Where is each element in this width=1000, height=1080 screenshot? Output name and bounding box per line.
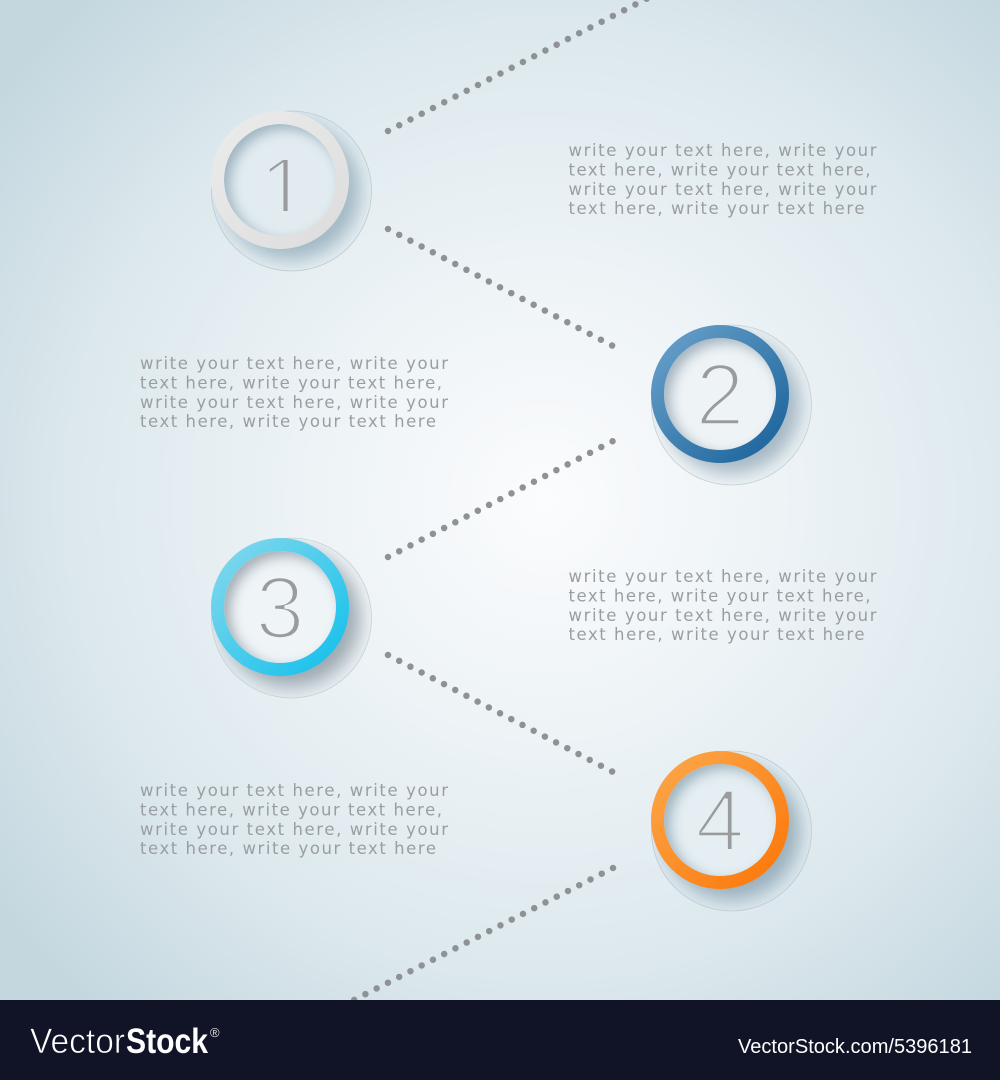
text block 4 bbox=[140, 781, 448, 858]
text block 1: write your text here, write your bbox=[568, 180, 877, 199]
text block 1: write your text here, write your bbox=[568, 141, 877, 160]
text block 4: text here, write your text here, bbox=[140, 800, 442, 820]
text block 3 bbox=[568, 567, 877, 644]
number 4: 4 bbox=[696, 771, 744, 870]
step 4 badge bbox=[651, 750, 812, 912]
step 1 badge bbox=[211, 110, 372, 272]
VectorStock logo: Vector bbox=[30, 1022, 125, 1061]
VectorStock logo: Stock bbox=[126, 1022, 208, 1061]
text block 2: write your text here, write your bbox=[140, 354, 448, 373]
image id: VectorStock.com/5396181 bbox=[738, 1036, 972, 1058]
number 2: 2 bbox=[696, 345, 744, 444]
text block 1: text here, write your text here, bbox=[568, 160, 870, 180]
step 2 badge bbox=[651, 324, 812, 486]
text block 4: write your text here, write your bbox=[140, 820, 448, 839]
text block 3: write your text here, write your bbox=[568, 606, 877, 625]
dotted connector lines bbox=[352, 0, 650, 1001]
text block 2: text here, write your text here, bbox=[140, 374, 442, 392]
text block 4: write your text here, write your bbox=[140, 781, 448, 800]
footer bar bbox=[0, 1000, 1000, 1080]
text block 1 bbox=[568, 141, 877, 218]
text block 3: write your text here, write your bbox=[568, 567, 877, 586]
text block 2: text here, write your text here bbox=[140, 412, 436, 431]
step 3 badge bbox=[211, 538, 372, 698]
text block 1: text here, write your text here bbox=[568, 199, 864, 218]
text block 2: write your text here, write your bbox=[140, 393, 448, 412]
text block 3: text here, write your text here bbox=[568, 625, 864, 644]
number 3: 3 bbox=[256, 558, 304, 657]
VectorStock logo bbox=[30, 1022, 220, 1061]
text block 4: text here, write your text here bbox=[140, 839, 436, 858]
text block 2 bbox=[140, 354, 448, 431]
text block 3: text here, write your text here, bbox=[568, 586, 870, 606]
number 1: 1 bbox=[260, 139, 308, 238]
VectorStock logo: ® bbox=[210, 1025, 220, 1040]
